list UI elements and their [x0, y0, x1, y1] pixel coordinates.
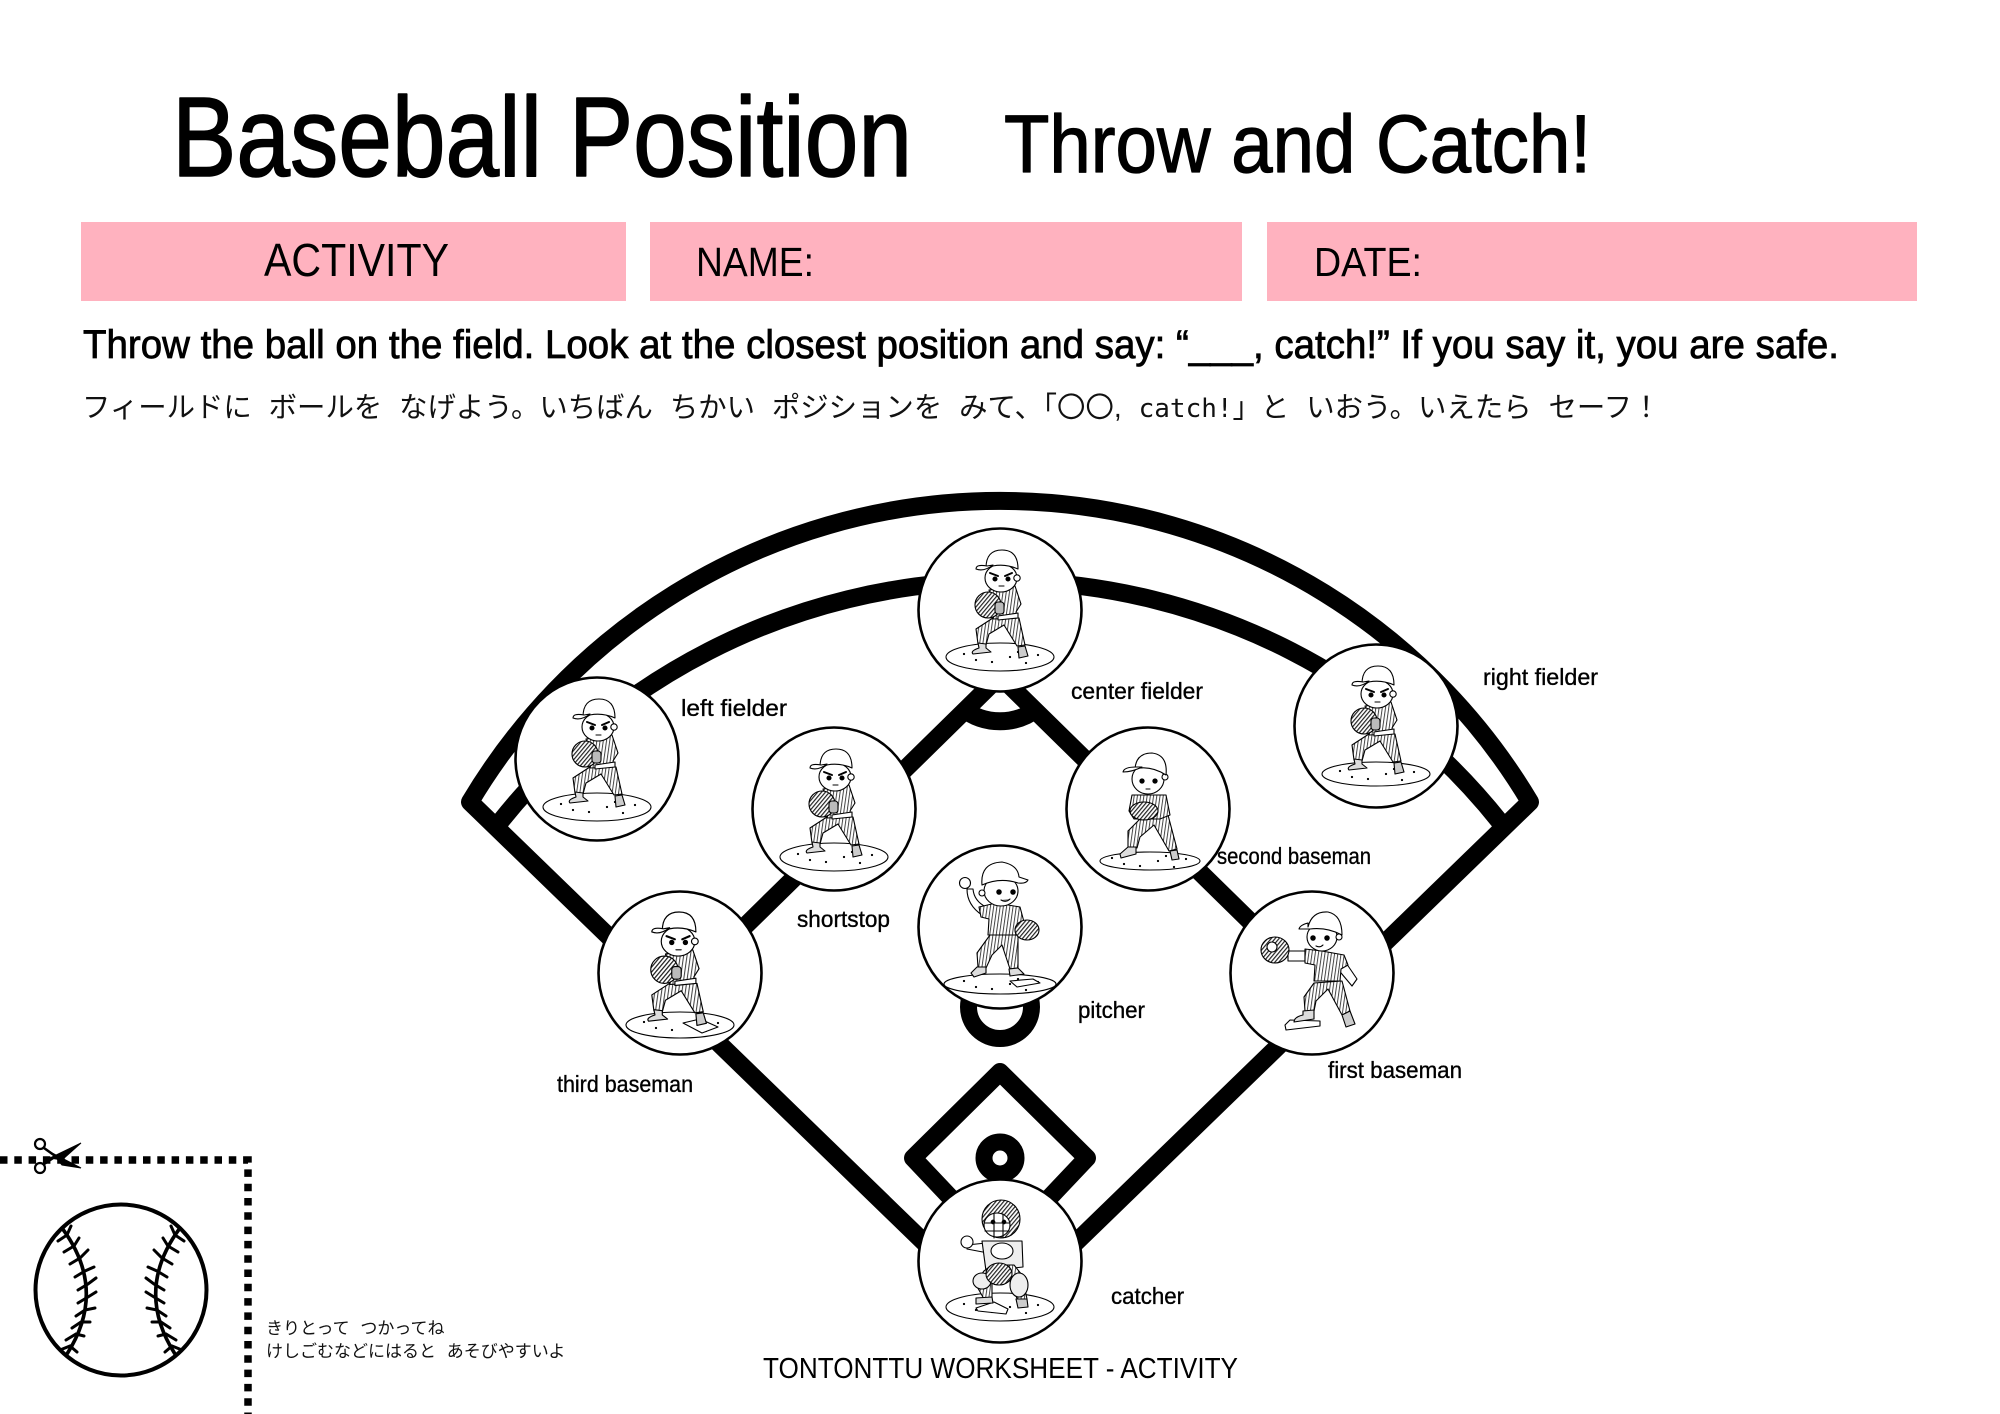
panel: name field bar — [650, 222, 1242, 301]
label: shortstop: shortstop — [797, 906, 890, 932]
player: catcher — [918, 1180, 1082, 1342]
player: center fielder — [918, 528, 1082, 692]
note: cut out and use: きりとって つかってね — [266, 1319, 445, 1338]
label: second baseman: second baseman — [1217, 843, 1371, 869]
icon: scissors — [35, 1139, 81, 1173]
subtitle: Throw and Catch! — [1004, 99, 1591, 190]
player: pitcher — [918, 846, 1082, 1008]
panel: activity label bar — [81, 222, 626, 301]
player: second baseman — [1066, 728, 1230, 890]
panel: date field bar — [1267, 222, 1917, 301]
panel: name field bar: NAME: — [696, 239, 814, 285]
player: right fielder — [1294, 644, 1458, 808]
title: Baseball Position — [172, 74, 912, 200]
label: first baseman: first baseman — [1328, 1057, 1462, 1083]
player: shortstop — [752, 728, 916, 890]
Japanese instructions: フィールドに ボールを なげよう。いちばん ちかい ポジションを みて、「〇〇, catch!」と いおう。いえたら セーフ！ — [82, 392, 1660, 424]
footer text: TONTONTTU WORKSHEET - ACTIVITY — [763, 1353, 1238, 1385]
label: pitcher: pitcher — [1078, 997, 1145, 1023]
player: left fielder — [516, 678, 678, 840]
note: cut out and use — [266, 1319, 565, 1361]
label: third baseman: third baseman — [557, 1071, 693, 1097]
English instructions: Throw the ball on the field. Look at the closest position and say: “___, catch!” If you say it, you are safe. — [83, 323, 1839, 367]
panel: date field bar: DATE: — [1314, 239, 1422, 285]
player: third baseman — [598, 892, 762, 1054]
baseball field lines — [470, 501, 1530, 1316]
cut line: dotted — [0, 1160, 248, 1414]
label: catcher: catcher — [1111, 1283, 1184, 1309]
label: center fielder: center fielder — [1071, 678, 1203, 704]
panel: activity label bar: ACTIVITY — [264, 234, 449, 286]
label: right fielder: right fielder — [1483, 664, 1598, 690]
note: cut out and use: けしごむなどにはると あそびやすいよ — [266, 1342, 565, 1361]
player: first baseman — [1230, 892, 1394, 1054]
label: left fielder: left fielder — [681, 695, 787, 721]
icon: cut-out baseball — [36, 1204, 206, 1376]
